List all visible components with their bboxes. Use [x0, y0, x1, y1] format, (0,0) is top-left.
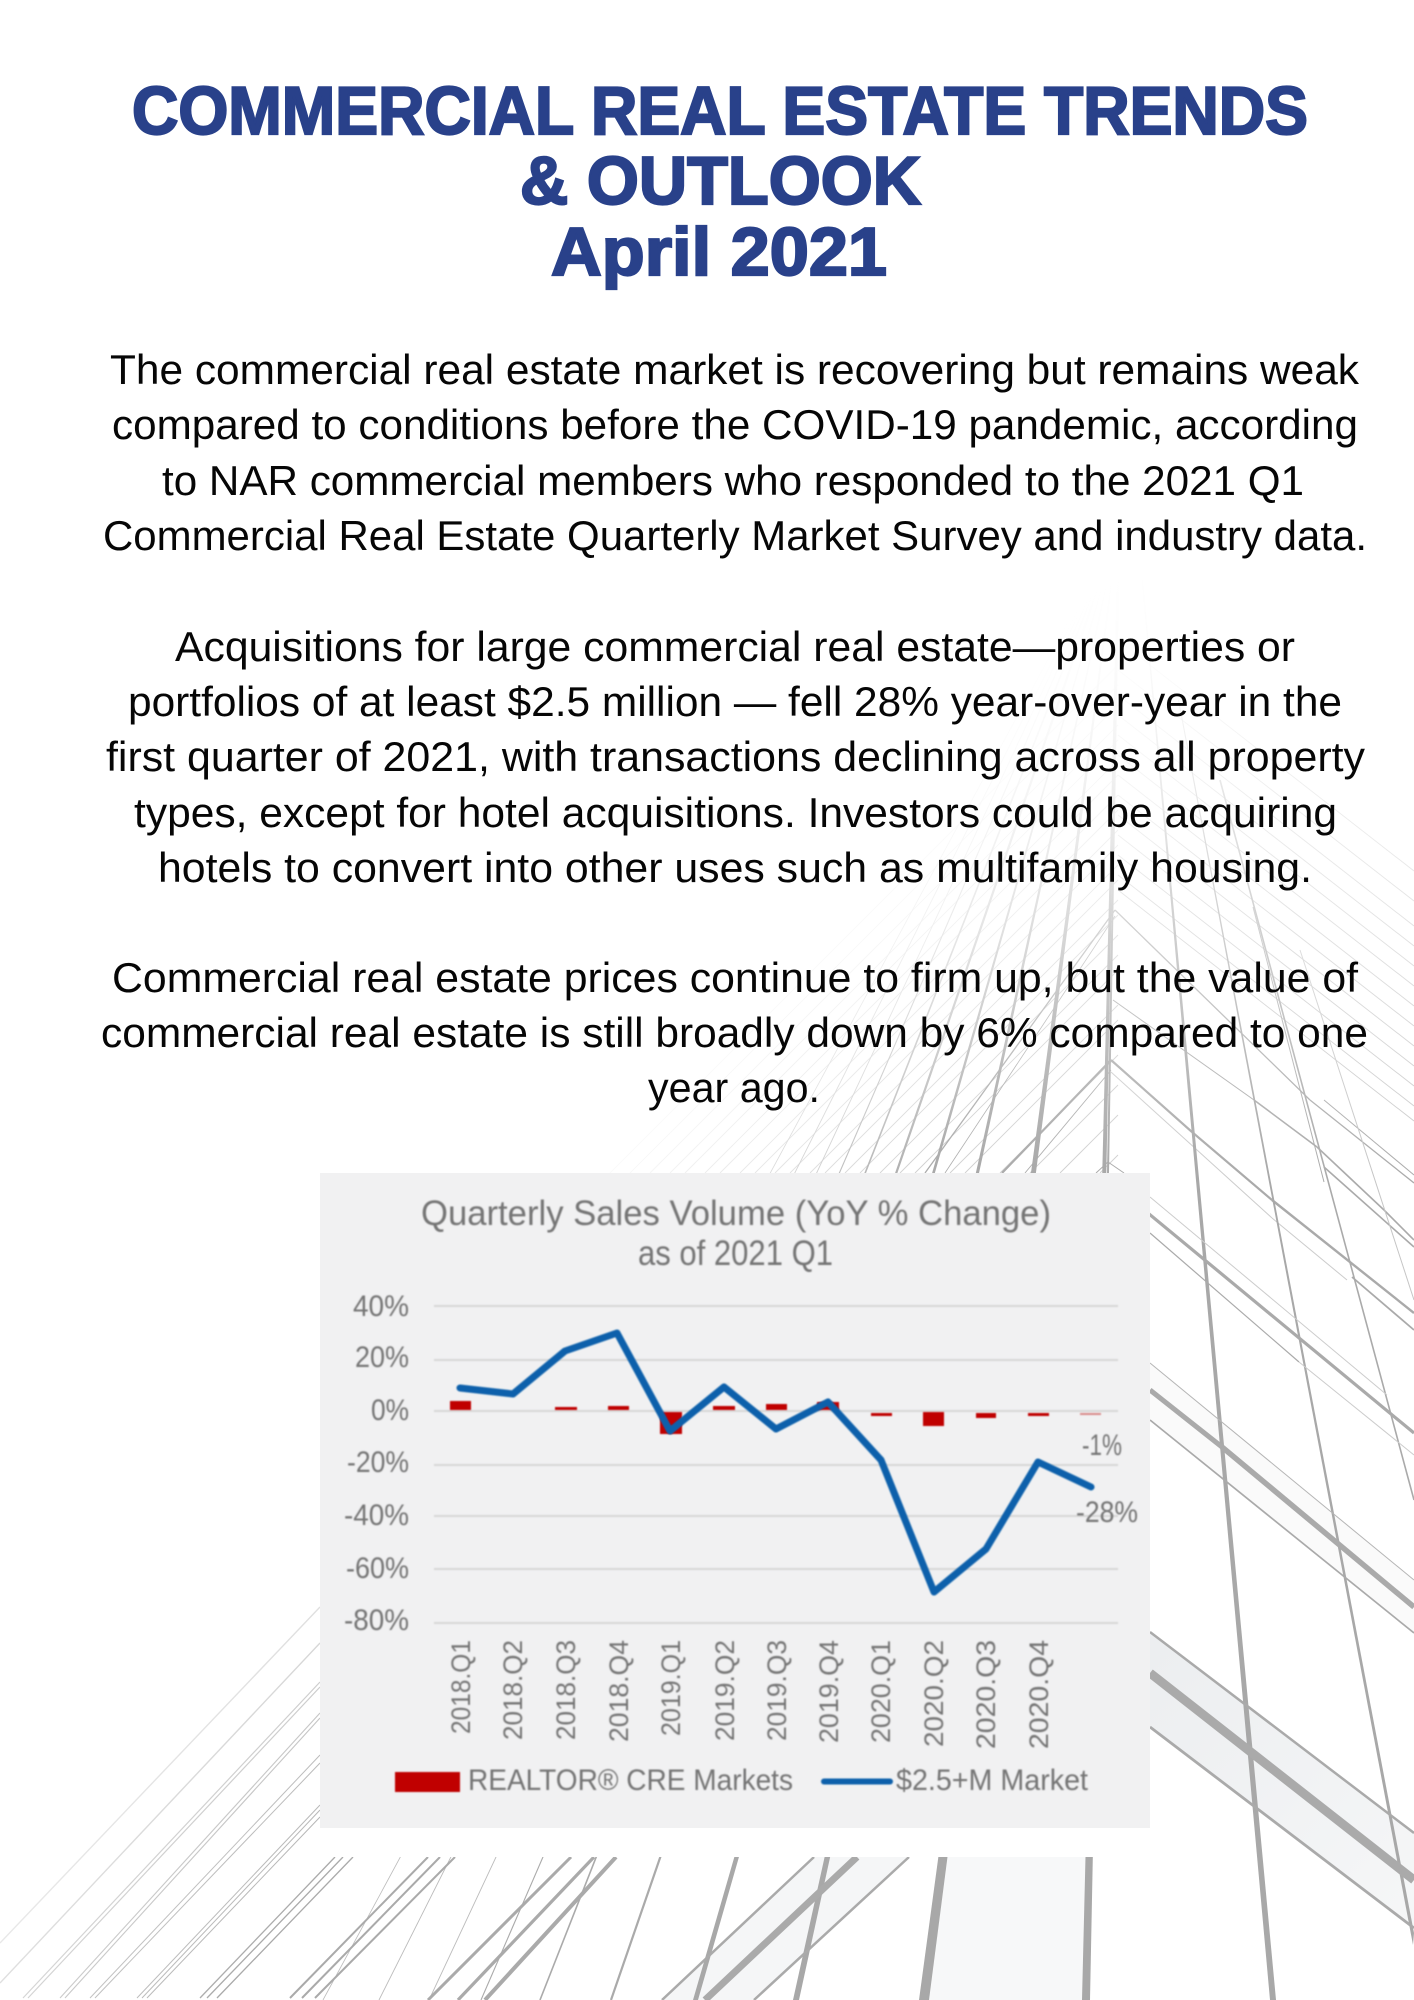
value callouts: -1% [1082, 1429, 1122, 1462]
x axis quarter labels: 2018.Q1 [446, 1640, 476, 1734]
text block: acquisitions paragraph: Acquisitions for large commercial real estate—properties or [175, 623, 1295, 670]
bottom-left floor lines [705, 1857, 857, 2000]
line: $2.5+M market [460, 1333, 1091, 1592]
value callouts [1076, 1429, 1138, 1529]
title: & OUTLOOK [520, 143, 921, 219]
right face floor bands [1108, 1180, 1414, 1433]
panel: quarterly sales volume chart [320, 1173, 1150, 1857]
y axis grid lines and labels: 40% [353, 1290, 409, 1323]
text block: acquisitions paragraph [106, 623, 1365, 891]
chart title [421, 1194, 1051, 1273]
legend: $2.5+M Market [896, 1764, 1089, 1797]
bars: REALTOR CRE markets [450, 1401, 1101, 1434]
y axis grid lines and labels: -60% [346, 1552, 409, 1585]
text block: market overview paragraph [103, 346, 1367, 559]
title [132, 73, 1308, 290]
y axis grid lines and labels: 20% [355, 1341, 409, 1374]
text block: acquisitions paragraph: portfolios of at least $2.5 million — fell 28% year-over-year in the [128, 678, 1342, 725]
text block: market overview paragraph: The commercial real estate market is recovering but remains weak [110, 346, 1360, 393]
x axis quarter labels: 2018.Q3 [551, 1640, 581, 1740]
x axis quarter labels: 2019.Q4 [814, 1640, 844, 1743]
x axis quarter labels: 2020.Q1 [866, 1640, 896, 1743]
legend: REALTOR® CRE Markets [468, 1764, 793, 1797]
text block: market overview paragraph: compared to conditions before the COVID-19 pandemic, according [112, 401, 1358, 448]
text block: acquisitions paragraph: first quarter of 2021, with transactions declining across all property [106, 733, 1365, 780]
y axis grid lines and labels: 0% [371, 1394, 409, 1427]
fan verticals on the right [1140, 560, 1276, 2000]
title: COMMERCIAL REAL ESTATE TRENDS [132, 73, 1308, 149]
x axis quarter labels: 2018.Q4 [604, 1640, 634, 1742]
text block: prices paragraph: Commercial real estate prices continue to firm up, but the value of [112, 954, 1358, 1001]
text block: prices paragraph: year ago. [648, 1064, 820, 1111]
text block: acquisitions paragraph: hotels to convert into other uses such as multifamily housing. [158, 844, 1312, 891]
x axis quarter labels: 2018.Q2 [498, 1640, 528, 1740]
x axis quarter labels: 2019.Q1 [656, 1640, 686, 1736]
chart title: as of 2021 Q1 [638, 1234, 833, 1273]
legend [395, 1764, 1089, 1797]
y axis grid lines and labels [344, 1290, 1118, 1637]
text block: prices paragraph: commercial real estate is still broadly down by 6% compared to one [101, 1009, 1368, 1056]
x axis quarter labels [446, 1640, 1054, 1749]
text block: market overview paragraph: to NAR commercial members who responded to the 2021 Q1 [162, 457, 1304, 504]
y axis grid lines and labels: -20% [347, 1446, 409, 1479]
text block: market overview paragraph: Commercial Real Estate Quarterly Market Survey and industry data. [103, 512, 1367, 559]
x axis quarter labels: 2020.Q4 [1024, 1640, 1054, 1749]
text block: acquisitions paragraph: types, except for hotel acquisitions. Investors could be acquiring [134, 789, 1337, 836]
x axis quarter labels: 2019.Q3 [762, 1640, 792, 1741]
fan verticals on the left [1082, 530, 1119, 2000]
chart title: Quarterly Sales Volume (YoY % Change) [421, 1194, 1051, 1233]
x axis quarter labels: 2020.Q2 [919, 1640, 949, 1747]
x axis quarter labels: 2020.Q3 [971, 1640, 1001, 1749]
title: April 2021 [551, 214, 887, 290]
y axis grid lines and labels: -80% [344, 1604, 409, 1637]
x axis quarter labels: 2019.Q2 [710, 1640, 740, 1741]
text block: prices paragraph [101, 954, 1368, 1111]
value callouts: -28% [1076, 1496, 1138, 1529]
y axis grid lines and labels: -40% [344, 1499, 409, 1532]
